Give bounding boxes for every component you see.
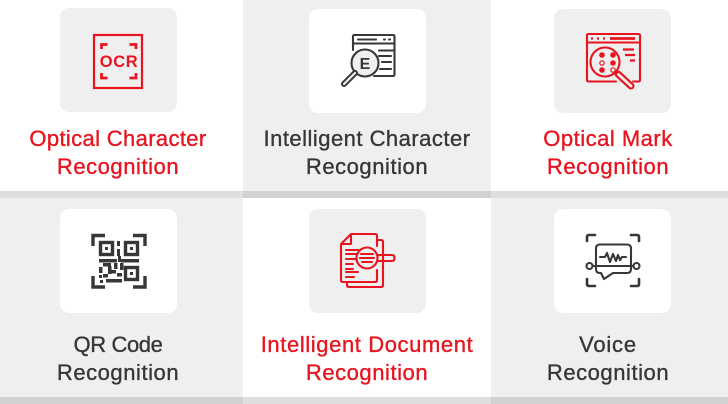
icon: OCR scan frame: OCR (100, 53, 138, 71)
icon: voice waveform bubble (586, 235, 640, 286)
icon card: ICR (309, 9, 426, 113)
label: Optical Mark Recognition: Optical Mark (543, 126, 673, 151)
label: Intelligent Document Recognition: Intelligent Document (261, 332, 473, 357)
panel: Intelligent Character Recognition (264, 9, 470, 179)
icon: OCR scan frame (94, 35, 142, 88)
label: Intelligent Character Recognition: Intelligent Character (264, 126, 470, 151)
icon card: IDR (309, 209, 426, 313)
icon: QR code (93, 236, 145, 287)
label: Intelligent Document Recognition: Recognition (306, 360, 428, 385)
label: Optical Character Recognition: Recognition (57, 154, 179, 179)
panel: Voice Recognition (547, 209, 671, 385)
label: Optical Mark Recognition: Recognition (547, 154, 669, 179)
icon: document with magnifier E (344, 35, 394, 84)
icon: document with magnifier E: E (360, 56, 371, 73)
panel: Optical Mark Recognition (543, 9, 673, 179)
label: Voice Recognition: Voice (579, 332, 637, 357)
icon: window with magnifier marks (587, 34, 640, 86)
icon card: QR (60, 209, 177, 313)
label: Intelligent Character Recognition: Recognition (306, 154, 428, 179)
label: QR Code Recognition: QR Code (74, 332, 163, 357)
panel: Intelligent Document Recognition (261, 209, 473, 385)
icon card: OMR (554, 9, 671, 113)
icon: documents with magnifier (341, 234, 394, 287)
panel: QR Code Recognition (57, 209, 179, 385)
panel: Optical Character Recognition (29, 8, 207, 179)
label: Voice Recognition: Recognition (547, 360, 669, 385)
icon card: Voice (554, 209, 671, 313)
icon card: OCR (60, 8, 177, 112)
label: QR Code Recognition: Recognition (57, 360, 179, 385)
label: Optical Character Recognition: Optical Character (29, 126, 207, 151)
